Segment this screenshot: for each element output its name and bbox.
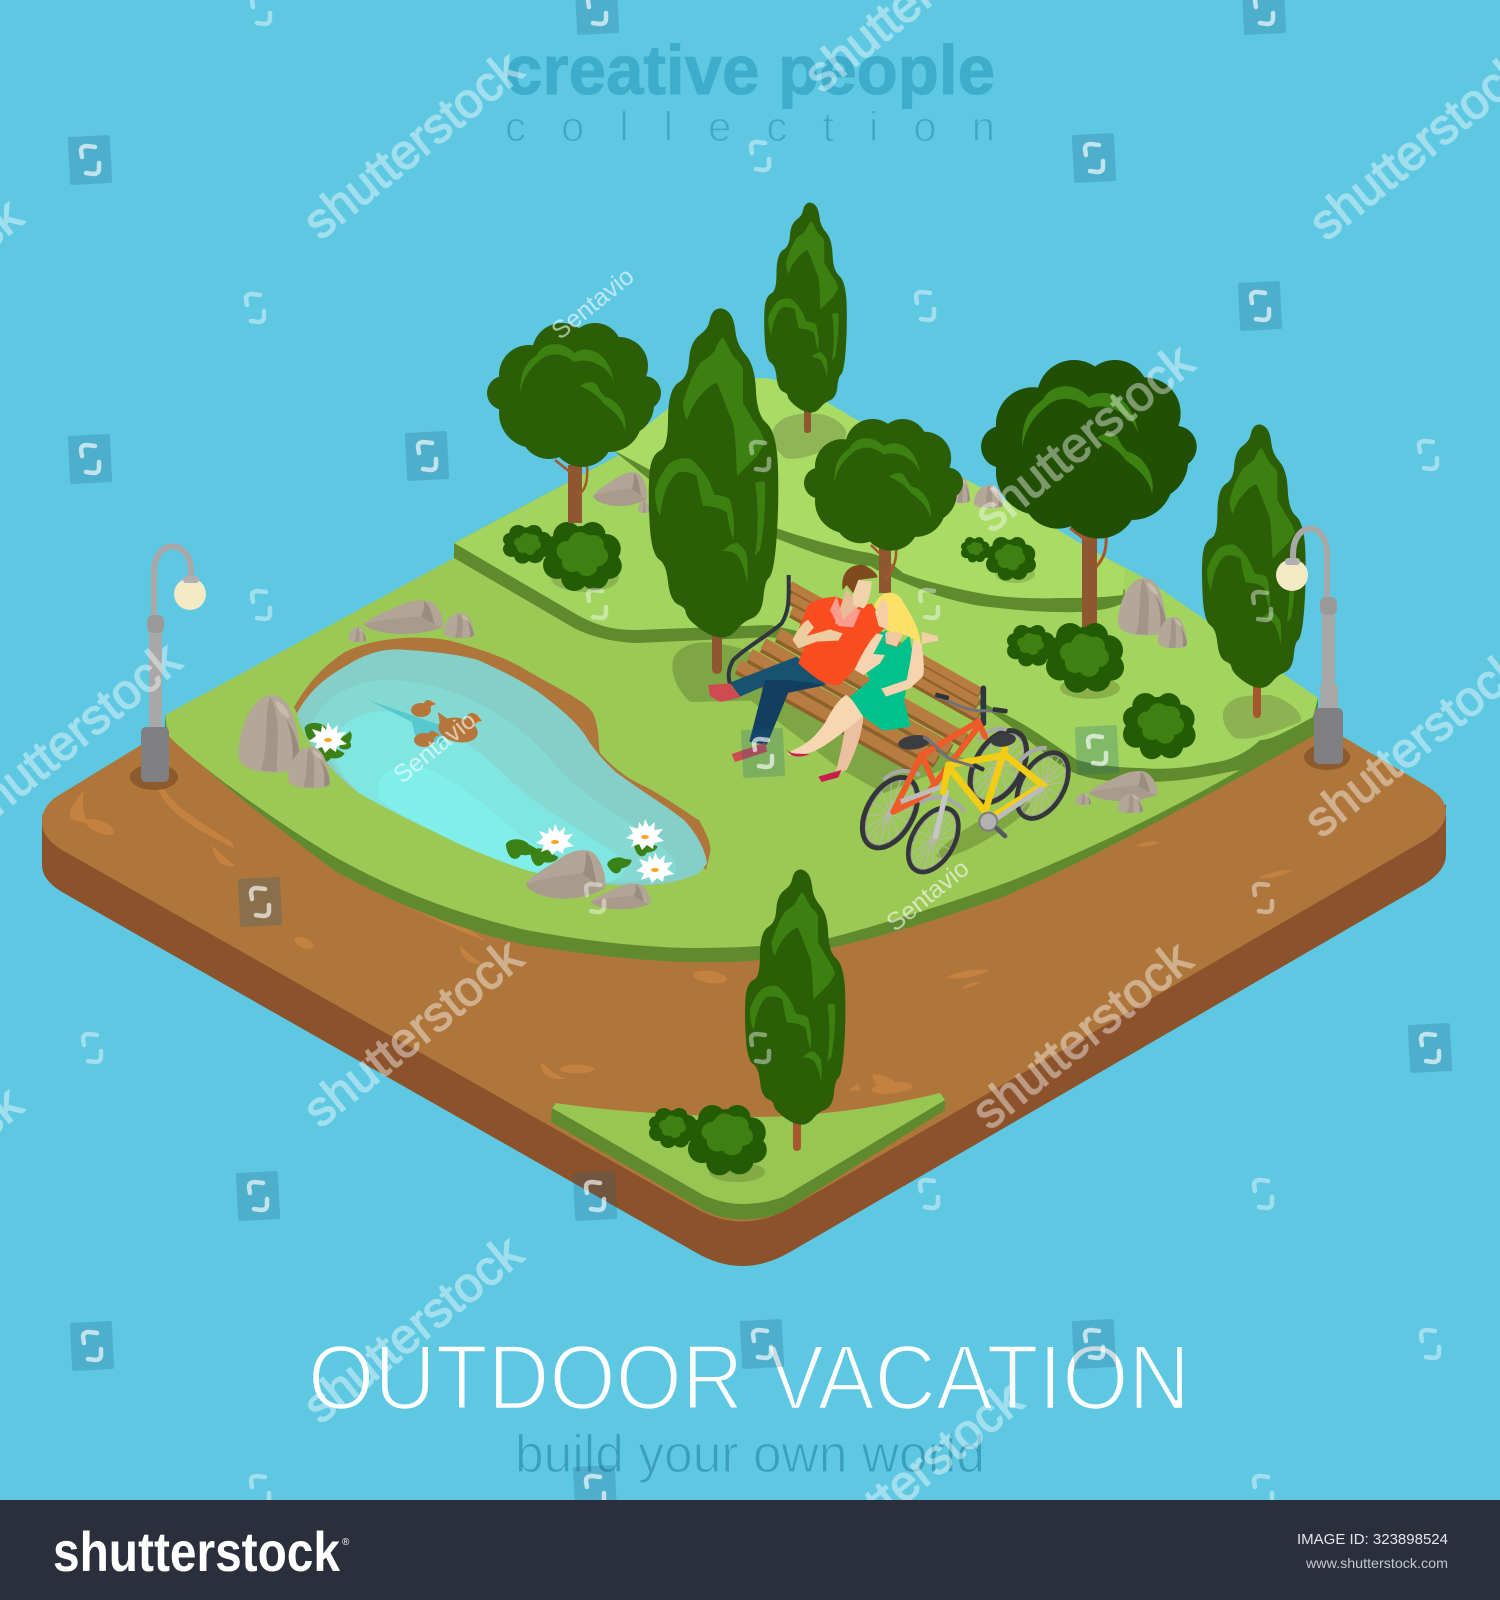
round tree 2 bbox=[804, 419, 963, 593]
water lilies bbox=[305, 722, 674, 883]
footer logo: shutterstock bbox=[53, 1520, 341, 1583]
bush pair right bbox=[1007, 623, 1124, 699]
heading: creative people collection: collection bbox=[505, 103, 995, 150]
terrace B bbox=[613, 378, 1125, 612]
watermark overlay: shutterstock bbox=[293, 929, 533, 1138]
round tree 3 bbox=[981, 360, 1197, 627]
round tree 1 bbox=[487, 323, 661, 523]
main grass level bbox=[165, 378, 1318, 962]
soil blotches bbox=[70, 790, 1292, 1096]
duck small lower bbox=[414, 731, 440, 747]
cypress right bbox=[1204, 426, 1304, 718]
watermark overlay: shutterstock bbox=[962, 931, 1202, 1140]
cypress bottom bbox=[747, 871, 844, 1151]
terrace A bbox=[454, 378, 1318, 782]
rocks bbox=[238, 472, 1187, 909]
duck large bbox=[436, 712, 482, 746]
soil top bbox=[42, 400, 1446, 1222]
subtitle: build your own world: build your own world bbox=[515, 1425, 985, 1484]
island base bbox=[42, 400, 1446, 1266]
footer bar bbox=[0, 1500, 1500, 1600]
grass top bbox=[165, 378, 1318, 948]
watermark overlay: Sentavio bbox=[546, 262, 640, 345]
watermark overlay: shutterstock bbox=[793, 1372, 1033, 1581]
ground shadows bbox=[672, 414, 1301, 1169]
pond depth 3 bbox=[378, 766, 575, 880]
bench back slats bbox=[790, 585, 980, 718]
watermark overlay: shutterstock bbox=[964, 334, 1204, 543]
woman bbox=[787, 593, 939, 782]
heading: creative people collection bbox=[505, 31, 995, 150]
bush pair upper right bbox=[961, 537, 1036, 583]
bicycles bbox=[851, 692, 1079, 881]
image id: IMAGE ID: 323898524 bbox=[1297, 1531, 1448, 1548]
cypress top bbox=[765, 204, 846, 433]
red bicycle bbox=[851, 692, 1038, 857]
watermark overlay: shutterstock bbox=[293, 1225, 533, 1434]
bush pair bottom bbox=[649, 1105, 767, 1182]
bushes behind bbox=[503, 522, 1036, 592]
bush single bbox=[1123, 693, 1196, 759]
bench shadow bbox=[750, 687, 967, 793]
website: www.shutterstock.com bbox=[1305, 1555, 1448, 1571]
lamp right bbox=[1276, 529, 1350, 770]
registered mark: ® bbox=[342, 1537, 350, 1548]
pond rim bbox=[294, 638, 710, 870]
pond water bbox=[297, 649, 707, 885]
triangle lawn bbox=[551, 1093, 945, 1220]
yellow bicycle bbox=[898, 732, 1079, 881]
duck small upper bbox=[411, 700, 436, 717]
pond depth 2 bbox=[333, 711, 626, 884]
ducks bbox=[411, 700, 482, 747]
title: outdoor vacation: OUTDOOR VACATION bbox=[308, 1327, 1190, 1429]
heading: creative people collection: creative people bbox=[505, 31, 995, 109]
man bbox=[708, 565, 887, 762]
grass side band bbox=[165, 700, 1318, 962]
bench iron frame bbox=[729, 575, 789, 685]
pond bbox=[294, 638, 710, 885]
watermark overlay: Sentavio bbox=[881, 854, 975, 937]
duck wake bbox=[368, 700, 445, 745]
cypress main bbox=[651, 310, 776, 674]
watermark overlay: Sentavio bbox=[388, 706, 482, 789]
bench seat slats bbox=[738, 633, 965, 769]
pond depth 1 bbox=[312, 680, 677, 882]
lamp left bbox=[130, 546, 206, 790]
soil side bbox=[42, 805, 1446, 1266]
watermark overlay: shutterstock bbox=[293, 41, 533, 250]
bush pair upper left bbox=[503, 522, 622, 591]
bench and couple bbox=[708, 565, 983, 793]
